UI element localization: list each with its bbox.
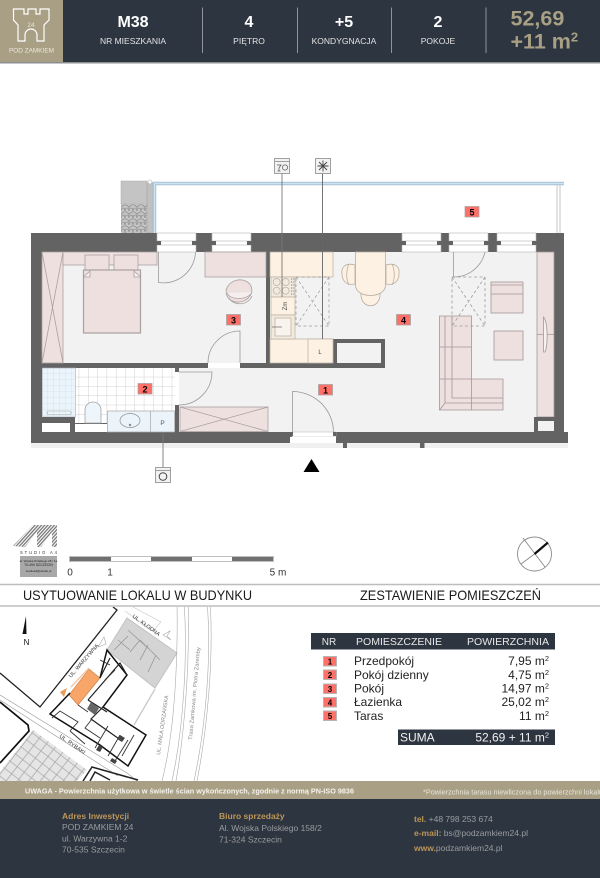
investment address: 70-535 Szczecin xyxy=(62,844,125,854)
street labels: UL. KŁODNA xyxy=(131,614,161,638)
logo: 24 xyxy=(27,22,35,29)
rooms table xyxy=(311,633,555,745)
Studio A4 logo: 70-490 SZCZECIN xyxy=(24,563,53,567)
room marker 3 xyxy=(226,314,240,325)
scale bar: 0 xyxy=(67,568,73,578)
header item: rooms xyxy=(421,14,456,46)
row 1: 7,95 m xyxy=(508,654,545,668)
row 5: Taras xyxy=(354,709,383,723)
row 3: Pokój xyxy=(354,682,384,696)
contact xyxy=(413,814,528,853)
notice band: *Powierzchnia tarasu niewliczona do powierzchni lokalu xyxy=(423,790,600,796)
row 4: 4 xyxy=(328,698,333,708)
row 4: 25,02 m xyxy=(501,695,545,709)
sales office: Biuro sprzedaży xyxy=(219,811,285,821)
sales office: Al. Wojska Polskiego 158/2 xyxy=(219,823,322,833)
investment address: ul. Warzywna 1-2 xyxy=(62,834,128,844)
header item: storey: KONDYGNACJA xyxy=(312,36,377,46)
header item: apartment number xyxy=(100,14,166,46)
room marker 3: 3 xyxy=(231,315,236,325)
kitchen: L xyxy=(318,350,322,356)
row 2: Pokój dzienny xyxy=(354,668,429,682)
icon: fridge snowflake xyxy=(316,158,330,339)
footer xyxy=(0,799,600,878)
investment address xyxy=(62,811,134,854)
heading: rooms summary: ZESTAWIENIE POMIESZCZEŃ xyxy=(360,587,541,603)
row 4: Łazienka xyxy=(354,695,402,709)
table header: NR xyxy=(322,637,336,648)
room marker 2 xyxy=(138,384,152,394)
total row: 2 xyxy=(545,730,549,740)
room marker 4 xyxy=(396,314,410,325)
row 5: 11 m xyxy=(519,709,545,723)
Studio A4 logo: al. Wojska Polskiego 25 / 1a xyxy=(20,559,58,563)
notice band xyxy=(0,781,600,799)
walls xyxy=(31,233,568,443)
header item: rooms: 2 xyxy=(434,14,443,31)
row 5 xyxy=(324,709,549,723)
icon: washing machine xyxy=(156,432,170,482)
total row: 52,69 + 11 m xyxy=(475,730,545,744)
room marker 4: 4 xyxy=(401,315,406,325)
table header: POMIESZCZENIE xyxy=(356,637,442,648)
logo: POD ZAMKIEM xyxy=(9,48,54,54)
header item: floor: 4 xyxy=(245,14,254,31)
header area total: 2 xyxy=(571,30,578,44)
bathroom xyxy=(42,368,175,432)
row 4 xyxy=(324,695,549,709)
contact: tel. +48 798 253 674 xyxy=(414,814,493,824)
windows xyxy=(157,233,536,252)
heading: location: USYTUOWANIE LOKALU W BUDYNKU xyxy=(23,587,252,603)
icon: dishwasher xyxy=(274,158,290,297)
terrace door and entrance door xyxy=(292,252,485,432)
Studio A4 logo: studioa4@studio.pl xyxy=(26,569,52,573)
room marker 2: 2 xyxy=(142,384,148,394)
hall wardrobe xyxy=(180,407,268,432)
row 3: 3 xyxy=(328,685,333,694)
icon: north arrow: N xyxy=(24,638,30,647)
row 3: 2 xyxy=(545,682,549,690)
room marker 1 xyxy=(318,384,332,395)
street labels: UL. RYBAKI xyxy=(58,734,86,756)
terrace railing xyxy=(121,180,564,233)
dining table with chairs xyxy=(342,252,399,306)
row 2 xyxy=(324,668,549,682)
icon: north arrow xyxy=(22,616,29,645)
room marker 1: 1 xyxy=(323,385,328,395)
investment address: POD ZAMKIEM 24 xyxy=(62,822,134,832)
street labels: UL. MAŁA ODRZAŃSKA xyxy=(155,695,170,755)
kitchen xyxy=(270,252,333,363)
row 5: 5 xyxy=(328,712,333,721)
investment address: Adres Inwestycji xyxy=(62,811,129,821)
bedroom and bathroom doors xyxy=(158,252,240,405)
header item: apartment number: M38 xyxy=(117,14,149,31)
header area total xyxy=(510,6,578,54)
Studio A4 logo: STUDIO A4 xyxy=(20,550,58,555)
row 2: 4,75 m xyxy=(508,668,545,682)
row 2: 2 xyxy=(328,671,333,680)
scale bar xyxy=(67,556,286,578)
scale bar: 5 m xyxy=(270,568,286,578)
header item: storey: +5 xyxy=(335,14,353,31)
room marker 5: 5 xyxy=(469,207,475,217)
street labels: UL. WARZYWNA xyxy=(68,643,101,679)
header area total: 52,69 xyxy=(510,6,564,30)
bedroom furniture xyxy=(42,252,266,363)
row 2: 2 xyxy=(545,668,549,677)
street labels xyxy=(58,614,202,756)
kitchen: Zm xyxy=(283,302,289,310)
living room furniture xyxy=(440,252,554,417)
table header: POWIERZCHNIA xyxy=(467,637,549,648)
logo xyxy=(0,0,63,62)
row 1: 1 xyxy=(328,658,333,666)
total row xyxy=(398,730,555,745)
header item: rooms: POKOJE xyxy=(421,36,456,46)
notice band: UWAGA - Powierzchnia użytkowa w świetle ścian wykończonych, zgodnie z normą PN-ISO 9836 xyxy=(25,788,354,796)
entrance arrow xyxy=(304,459,320,472)
room floors xyxy=(42,252,554,432)
entrance threshold xyxy=(290,432,336,443)
table header xyxy=(311,633,555,650)
row 4: 2 xyxy=(545,695,549,704)
header bar xyxy=(0,0,600,64)
bathroom: P xyxy=(160,420,165,427)
header item: apartment number: NR MIESZKANIA xyxy=(100,36,166,46)
header item: storey xyxy=(312,14,377,46)
Studio A4 logo xyxy=(13,525,58,577)
row 3 xyxy=(324,682,549,696)
street labels: Trasa Zamkowa im. Piotra Zaremby xyxy=(188,647,202,740)
sales office: 71-324 Szczecin xyxy=(219,834,282,844)
row 1 xyxy=(324,654,549,668)
total row: SUMA xyxy=(400,730,435,744)
row 3: 14,97 m xyxy=(501,682,545,696)
row 1: Przedpokój xyxy=(354,654,414,668)
header item: floor: PIĘTRO xyxy=(233,36,265,46)
room marker 5 xyxy=(465,206,479,217)
row 1: 2 xyxy=(545,654,549,663)
header item: floor xyxy=(233,14,265,46)
scale bar: 1 xyxy=(107,568,113,578)
header area total: +11 m xyxy=(510,30,571,54)
floor plan xyxy=(31,158,568,482)
row 5: 2 xyxy=(545,709,549,718)
compass xyxy=(518,537,552,571)
location map xyxy=(0,600,211,781)
sales office xyxy=(219,811,322,844)
highlighted apartment xyxy=(69,669,100,705)
contact: e-mail: bs@podzamkiem24.pl xyxy=(414,828,528,838)
contact: www.podzamkiem24.pl xyxy=(413,843,503,853)
